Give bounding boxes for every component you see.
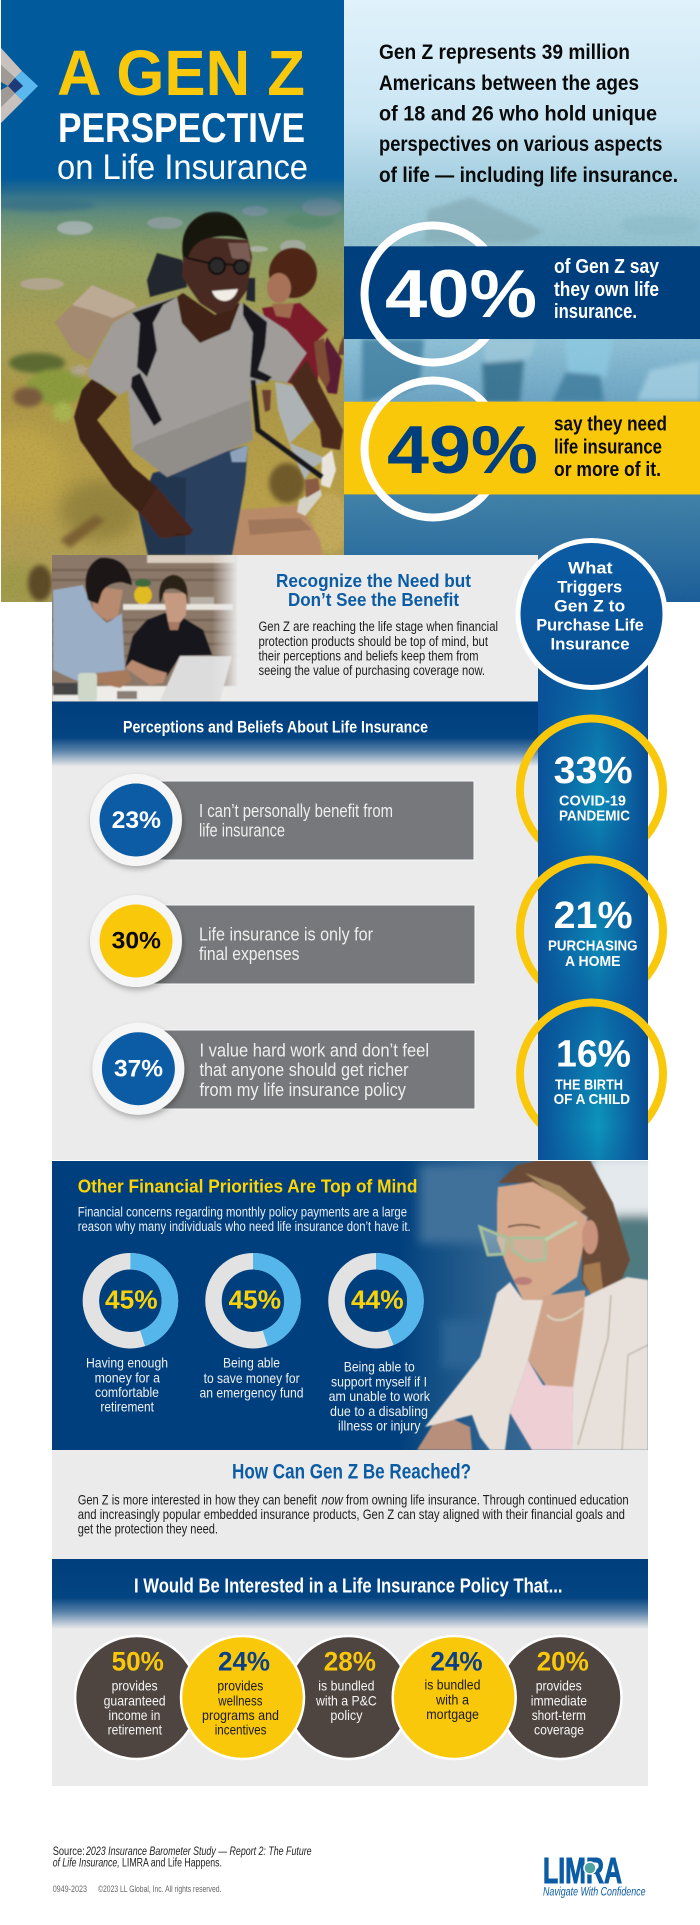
- heading: [276, 571, 471, 610]
- donut: 44% disability support: due to a disabling: [330, 1403, 428, 1419]
- donut: 45% retirement: money for a: [95, 1369, 160, 1385]
- stat: 40% own life insurance: [344, 226, 700, 362]
- heading: Don’t See the Benefit: [288, 590, 459, 610]
- stat: 33% COVID-19 pandemic: [520, 718, 663, 862]
- woman hiker: [262, 248, 344, 516]
- glasses: [480, 1227, 507, 1255]
- stat: 40% own life insurance: insurance.: [554, 301, 637, 323]
- donut: 45% emergency fund: [200, 1261, 304, 1401]
- body copy: seeing the value of purchasing coverage now.: [258, 663, 485, 678]
- donut: 44% disability support: [329, 1261, 431, 1434]
- shirt: [87, 296, 308, 450]
- head: [182, 237, 252, 314]
- donut: 45% emergency fund: to save money for: [204, 1370, 300, 1386]
- label: 24% mortgage: with a: [435, 1691, 469, 1707]
- stat: 21% purchasing a home: [520, 860, 663, 1002]
- label: 20%: 20%: [537, 1647, 589, 1677]
- label: 28%: with a P&C: [315, 1692, 377, 1708]
- stat: 49% need life insurance: or more of it.: [554, 459, 661, 481]
- footer: source and copyright: of Life Insurance,: [53, 1857, 120, 1869]
- stat: 40% own life insurance: 40%: [385, 256, 537, 332]
- label: 24% mortgage: is bundled: [424, 1676, 480, 1692]
- label: 24% wellness: wellness: [217, 1692, 262, 1708]
- circle: 20% short-term coverage: [498, 1636, 622, 1759]
- row: 37% value hard work: 37%: [114, 1056, 163, 1082]
- heading band: interested in a policy: I Would Be Interested in a Life Insurance Policy That...: [134, 1576, 562, 1598]
- stat: 49% need life insurance: life insurance: [554, 436, 662, 458]
- body copy: from owning life insurance. Through continued education: [346, 1492, 629, 1507]
- label: 24% wellness: [202, 1647, 279, 1738]
- body copy: protection products should be top of mind, but: [258, 634, 488, 649]
- jacket: [425, 1282, 543, 1450]
- label: 28%: 28%: [324, 1647, 376, 1677]
- backpack: [147, 253, 187, 297]
- label: 50%: 50%: [112, 1647, 164, 1677]
- donut: 45% emergency fund: Being able: [223, 1355, 280, 1371]
- row: 37% value hard work: from my life insurance policy: [200, 1080, 406, 1100]
- arms: [74, 378, 193, 538]
- intro text: of life — including life insurance.: [379, 164, 678, 187]
- woman: [125, 613, 212, 676]
- row: 30% only for final expenses: 30%: [112, 928, 161, 954]
- label: 24% wellness: provides: [217, 1678, 263, 1694]
- body copy: their perceptions and beliefs keep them from: [258, 649, 478, 664]
- donut: 45% retirement: 45%: [105, 1284, 158, 1314]
- label: 20%: [531, 1647, 589, 1738]
- panel: title block: [0, 0, 344, 602]
- stat: 16% birth of a child: 16%: [556, 1034, 631, 1076]
- body copy: [78, 1492, 629, 1537]
- footer: source and copyright: LIMRA and Life Happens.: [122, 1857, 222, 1869]
- distant rocks: [20, 198, 342, 290]
- row: 23% can't personally benefit: [90, 774, 474, 866]
- label: 28%: policy: [330, 1707, 362, 1723]
- heading band: perceptions and beliefs: Perceptions and Beliefs About Life Insurance: [123, 719, 428, 737]
- intro text: perspectives on various aspects: [379, 133, 662, 156]
- straps: [132, 297, 177, 377]
- chest and top: [528, 1290, 585, 1387]
- callout: what triggers heading: What: [568, 559, 613, 578]
- label: 24% mortgage: mortgage: [426, 1706, 479, 1722]
- body copy: Gen Z are reaching the life stage when financial: [258, 619, 498, 634]
- row: 37% value hard work: [92, 1023, 475, 1115]
- hero photo: hikers on a hillside: [0, 170, 350, 607]
- logo: LIMRA: Navigate With Confidence: [543, 1886, 646, 1898]
- stat: 16% birth of a child: OF A CHILD: [554, 1091, 630, 1108]
- laptop: [160, 656, 232, 701]
- stat: 33% COVID-19 pandemic: 33%: [554, 750, 633, 792]
- stat: 21% purchasing a home: A HOME: [565, 953, 620, 970]
- label: 24% mortgage: 24%: [430, 1647, 483, 1677]
- callout: what triggers heading: Insurance: [550, 634, 630, 654]
- donut: 44% disability support: illness or injury: [338, 1418, 420, 1434]
- donut: 44% disability support: 44%: [351, 1284, 404, 1314]
- donut: 44% disability support: support myself if I: [331, 1373, 427, 1389]
- panel: gray body upper: [52, 555, 538, 1160]
- label: 50%: guaranteed: [104, 1692, 166, 1708]
- callout: what triggers heading: [518, 540, 665, 688]
- heading: How Can Gen Z Be Reached?: [232, 1461, 471, 1484]
- body copy: [258, 619, 498, 678]
- man: [53, 585, 125, 681]
- label: 24% wellness: incentives: [215, 1722, 266, 1738]
- donut: 44% disability support: am unable to work: [329, 1388, 431, 1404]
- donut: 45% retirement: retirement: [100, 1399, 154, 1415]
- row: 37% value hard work: that anyone should get richer: [200, 1060, 409, 1080]
- donut: 45% retirement: comfortable: [95, 1384, 159, 1400]
- label: 24% wellness: 24%: [218, 1647, 270, 1677]
- callout: what triggers heading: Triggers: [557, 578, 622, 597]
- row: 23% can't personally benefit: 23%: [112, 807, 161, 834]
- donut: 45% retirement: Having enough: [86, 1354, 168, 1370]
- stat: 16% birth of a child: [520, 1002, 663, 1146]
- heading: Other Financial Priorities Are Top of Mind: [78, 1177, 417, 1197]
- footer: source and copyright: 0949-2023: [53, 1884, 87, 1894]
- donut: 45% emergency fund: an emergency fund: [200, 1385, 304, 1401]
- label: 50%: retirement: [108, 1722, 162, 1738]
- chart: overlapping policy-interest circles: [75, 1636, 622, 1759]
- footer: source and copyright: Source:: [53, 1846, 85, 1858]
- circle: 50% guaranteed income: [75, 1636, 198, 1759]
- title: A GEN Z: A GEN Z: [57, 37, 305, 109]
- body copy: [78, 1205, 411, 1234]
- body copy: get the protection they need.: [78, 1522, 218, 1537]
- stat: 40% own life insurance: of Gen Z say: [554, 256, 660, 278]
- photo: woman with glasses: [412, 1161, 648, 1450]
- jeans: [152, 445, 248, 555]
- row: 37% value hard work: I value hard work and don’t feel: [200, 1040, 429, 1060]
- label: 28%: is bundled: [318, 1678, 374, 1694]
- label: 20%: short-term: [532, 1707, 586, 1723]
- heading: Recognize the Need but: [276, 571, 471, 591]
- donut: 45% retirement: [86, 1261, 170, 1415]
- circle: 24% wellness programs: [181, 1636, 304, 1759]
- stat: 49% need life insurance: [344, 380, 700, 518]
- footer: source and copyright: [53, 1846, 312, 1894]
- intro text: Gen Z represents 39 million: [379, 41, 630, 64]
- row: 30% only for final expenses: [90, 895, 475, 987]
- photo: couple at laptop: [52, 555, 238, 702]
- label: 50%: [104, 1647, 166, 1738]
- arm: [416, 1418, 473, 1450]
- footer: source and copyright: 2023 Insurance Barometer Study — Report 2: The Future: [85, 1846, 312, 1858]
- label: 24% wellness: programs and: [202, 1707, 279, 1723]
- label: 50%: income in: [108, 1707, 160, 1723]
- donut: 44% disability support: Being able to: [344, 1359, 415, 1375]
- stat: 21% purchasing a home: 21%: [554, 895, 633, 937]
- callout: what triggers heading: Purchase Life: [536, 616, 644, 634]
- donut: 45% emergency fund: 45%: [229, 1284, 281, 1314]
- hair: [498, 1160, 630, 1300]
- stat: 49% need life insurance: say they need: [554, 414, 667, 436]
- body copy: reason why many individuals who need life insurance don’t have it.: [78, 1219, 411, 1234]
- neck: [177, 293, 240, 343]
- title: PERSPECTIVE: PERSPECTIVE: [58, 104, 305, 151]
- stat: 16% birth of a child: THE BIRTH: [555, 1077, 623, 1094]
- stat: 40% own life insurance: they own life: [554, 279, 659, 301]
- callout: what triggers heading: Gen Z to: [554, 597, 625, 616]
- label: 20%: coverage: [534, 1722, 584, 1738]
- label: 28%: [315, 1647, 377, 1723]
- label: 20%: immediate: [531, 1692, 587, 1708]
- man hiker: [74, 212, 343, 555]
- footer: source and copyright: ©2023 LL Global, Inc. All rights reserved.: [98, 1884, 221, 1894]
- label: 24% mortgage: [424, 1647, 483, 1722]
- stat: 49% need life insurance: 49%: [387, 412, 538, 488]
- circle: 28% P&C bundle: [287, 1636, 410, 1759]
- label: 50%: provides: [112, 1678, 158, 1694]
- boulder: [55, 304, 134, 360]
- row: 30% only for final expenses: final expenses: [199, 944, 300, 964]
- circle: 24% mortgage bundle: [393, 1636, 516, 1759]
- row: 23% can't personally benefit: life insurance: [199, 821, 285, 841]
- stat: 21% purchasing a home: PURCHASING: [548, 937, 638, 954]
- stat: 33% COVID-19 pandemic: COVID-19: [559, 793, 626, 810]
- stat: 33% COVID-19 pandemic: PANDEMIC: [559, 808, 630, 825]
- text block: recognize the need: [258, 571, 498, 678]
- row: 23% can't personally benefit: I can’t personally benefit from: [199, 801, 393, 821]
- hand: [140, 487, 193, 538]
- intro text: [379, 41, 678, 187]
- intro text: Americans between the ages: [379, 72, 639, 95]
- body copy: now: [321, 1492, 344, 1507]
- icon: chevron diamonds: [1, 48, 38, 123]
- row: 30% only for final expenses: Life insurance is only for: [199, 924, 373, 944]
- panel: intro and headline statistics: [344, 0, 700, 602]
- heading band: perceptions and beliefs: [52, 702, 538, 766]
- title: on Life Insurance: on Life Insurance: [57, 148, 308, 187]
- face: [497, 1182, 587, 1300]
- trail: [232, 505, 322, 555]
- intro text: of 18 and 26 who hold unique: [379, 102, 657, 126]
- body copy: Financial concerns regarding monthly policy payments are a large: [78, 1205, 407, 1220]
- logo: LIMRA: LIMRA: [543, 1850, 622, 1891]
- panel: what triggers Gen Z column: [518, 540, 665, 1160]
- body copy: Gen Z is more interested in how they can benefit: [78, 1492, 317, 1507]
- panel: other financial priorities: [52, 1155, 660, 1450]
- heading band: interested in a policy: [52, 1559, 648, 1629]
- label: 20%: provides: [536, 1678, 582, 1694]
- panel: how can Gen Z be reached: [52, 1450, 648, 1786]
